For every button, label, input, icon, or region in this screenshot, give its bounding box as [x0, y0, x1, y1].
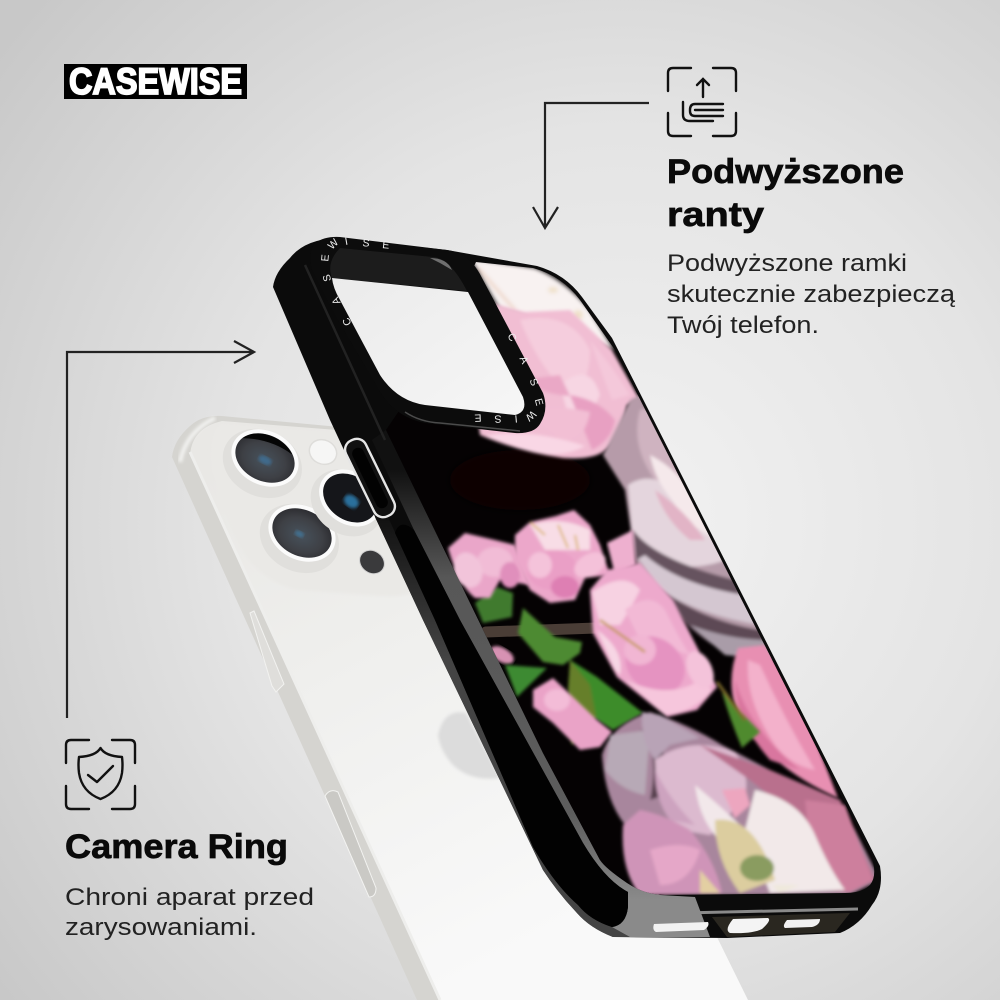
ring brand text: CASEWISE — [319, 236, 390, 328]
icon: raised edges — [668, 68, 736, 136]
ring body — [311, 237, 545, 433]
text: raised edges description — [667, 250, 956, 339]
text: raised edges description: Podwyższone ramki — [667, 250, 907, 277]
raised camera ring — [311, 236, 545, 433]
small lower pink flower — [533, 678, 612, 750]
text: camera ring description: zarysowaniami. — [65, 914, 257, 941]
icon: shield — [66, 740, 135, 809]
heading: raised edges: Podwyższone — [667, 153, 904, 191]
logo: CASEWISE — [69, 61, 242, 102]
centre pink flower — [515, 510, 610, 603]
phone side frame — [172, 416, 748, 1000]
translucent strip beside artwork — [372, 430, 710, 937]
flash — [305, 435, 341, 469]
lens 3 — [298, 455, 396, 550]
right-of-centre petal — [607, 530, 636, 575]
white iPhone behind the case — [172, 416, 748, 1000]
black transparent case — [273, 238, 881, 938]
see-through camera window — [332, 278, 524, 415]
raised camera ring: CASEWISE — [474, 331, 545, 425]
mid pink flower — [590, 563, 719, 717]
small pink flower cluster left — [448, 533, 530, 598]
sensor — [355, 546, 389, 578]
flower artwork on case — [380, 255, 890, 905]
stem — [486, 628, 596, 632]
right grey-lilac flower — [603, 395, 775, 660]
text: camera ring description — [65, 884, 314, 941]
side slot — [395, 525, 628, 927]
artwork dark background — [386, 353, 873, 895]
arrow: raised edges — [533, 103, 649, 228]
top pink peony — [470, 300, 640, 458]
side button lower — [325, 791, 376, 897]
small petal left — [491, 644, 516, 666]
heading: raised edges: ranty — [667, 196, 764, 234]
right pink flower — [731, 645, 838, 798]
bottom lip line — [640, 909, 858, 914]
outer rim — [375, 517, 640, 937]
ring bottom gloss — [405, 412, 520, 431]
side button upper — [250, 611, 284, 692]
green leaves — [475, 587, 760, 748]
volume button cutout — [342, 435, 398, 521]
phone back surface — [190, 421, 748, 1000]
case outer shell — [273, 238, 881, 938]
arrow: camera ring — [67, 341, 254, 718]
ring inner wall — [330, 248, 467, 291]
dark haze — [450, 450, 590, 510]
heading: raised edges — [667, 153, 904, 234]
phone edge highlight — [190, 452, 440, 1000]
lens 2 — [248, 491, 351, 586]
speaker holes — [653, 922, 708, 932]
camera bump — [211, 424, 420, 596]
side highlight — [305, 265, 385, 440]
text: camera ring description: Chroni aparat przed — [65, 884, 314, 911]
text: raised edges description: Twój telefon. — [667, 312, 819, 339]
top white petals — [470, 258, 614, 350]
bottom band right — [712, 913, 850, 937]
text: raised edges description: skutecznie zabezpieczą — [667, 281, 956, 308]
heading: camera ring: Camera Ring — [65, 828, 288, 866]
apple logo — [438, 712, 500, 779]
bottom large flower — [602, 712, 880, 895]
lens 1 — [211, 416, 314, 511]
